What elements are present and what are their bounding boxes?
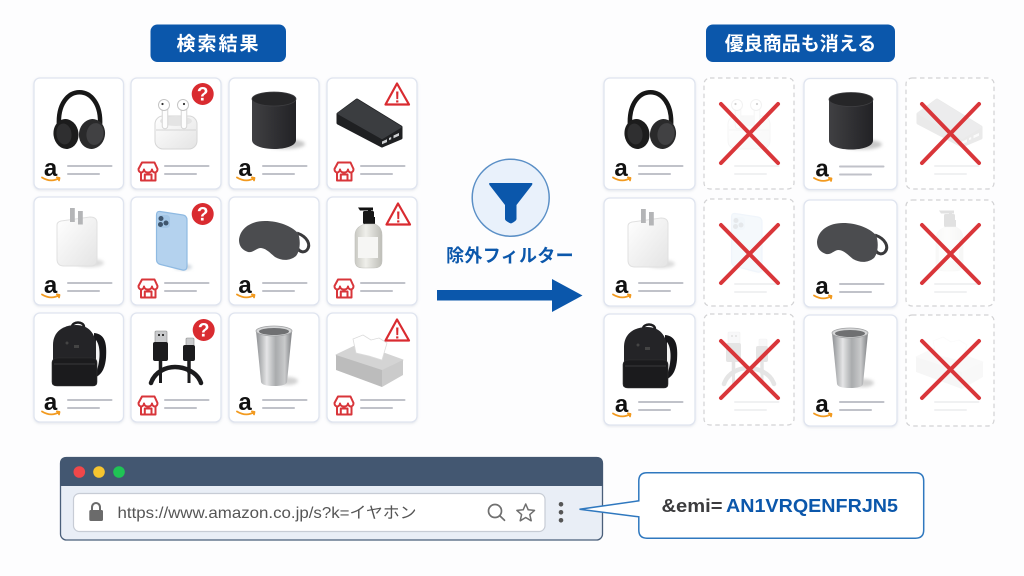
card: backpack kept: a <box>615 391 629 418</box>
panel: search results grid <box>34 78 417 422</box>
heading: search results: 検索結果 <box>176 33 261 55</box>
card: tumbler kept <box>804 315 897 426</box>
label: exclusion filter: 除外フィルター <box>446 246 574 266</box>
card: speaker kept: a <box>815 156 829 182</box>
card: tissue box store: ! <box>395 326 400 342</box>
card: sleep mask kept: a <box>815 273 829 300</box>
card: earbuds store: ? <box>197 84 209 106</box>
icon: filter funnel <box>472 159 549 236</box>
arrow <box>437 279 582 312</box>
address bar <box>74 494 545 532</box>
heading: good products also vanish <box>706 24 895 62</box>
card: usb cable store <box>131 313 221 422</box>
callout text: AN1VRQENFRJN5 <box>726 496 898 516</box>
card: backpack kept <box>604 314 695 425</box>
heading: search results <box>150 24 286 62</box>
card: earbuds store <box>131 78 221 189</box>
card: sleep mask kept <box>804 200 897 307</box>
callout text: &emi= <box>662 496 722 516</box>
card: speaker kept <box>804 78 897 190</box>
window buttons <box>74 466 125 478</box>
card: earbuds removed <box>704 78 794 189</box>
card: headphones amazon: a <box>44 155 58 182</box>
card: speaker amazon: a <box>238 155 252 182</box>
card: usb cable store: ? <box>198 320 210 342</box>
url text: https://www.amazon.co.jp/s?k=イヤホン <box>118 505 416 522</box>
card: tumbler amazon: a <box>238 389 252 416</box>
card: backpack amazon <box>34 313 124 422</box>
card: charger amazon <box>34 197 124 305</box>
icon: search <box>488 504 504 520</box>
icon: menu dots <box>559 502 563 523</box>
card: sleep mask amazon <box>229 197 319 305</box>
callout: emi parameter <box>580 473 924 538</box>
card: tissue box removed <box>906 315 994 426</box>
card: tissue box store <box>327 313 417 422</box>
card: phone store: ? <box>197 204 209 226</box>
card: soap bottle removed <box>906 200 994 306</box>
heading: good products also vanish: 優良商品も消える <box>725 33 876 55</box>
icon: lock <box>89 503 103 521</box>
card: backpack amazon: a <box>44 389 58 416</box>
card: headphones amazon <box>34 78 124 189</box>
card: tumbler amazon <box>229 313 319 422</box>
card: soap bottle store <box>327 197 417 305</box>
card: charger amazon: a <box>44 272 58 299</box>
card: soap bottle store: ! <box>396 210 401 226</box>
card: power bank store <box>327 78 417 189</box>
browser window <box>60 457 603 540</box>
card: charger kept: a <box>615 272 629 299</box>
card: phone removed <box>704 199 794 306</box>
panel: filtered results grid <box>604 78 994 426</box>
card: sleep mask amazon: a <box>238 272 252 299</box>
card: headphones kept <box>604 78 695 190</box>
card: power bank store: ! <box>395 90 400 106</box>
card: power bank removed <box>906 78 994 189</box>
card: speaker amazon <box>229 78 319 189</box>
icon: star <box>517 504 534 521</box>
card: usb cable removed <box>704 314 794 425</box>
card: phone store <box>131 197 221 305</box>
card: tumbler kept: a <box>815 391 829 418</box>
card: charger kept <box>604 198 695 306</box>
card: headphones kept: a <box>614 155 628 182</box>
